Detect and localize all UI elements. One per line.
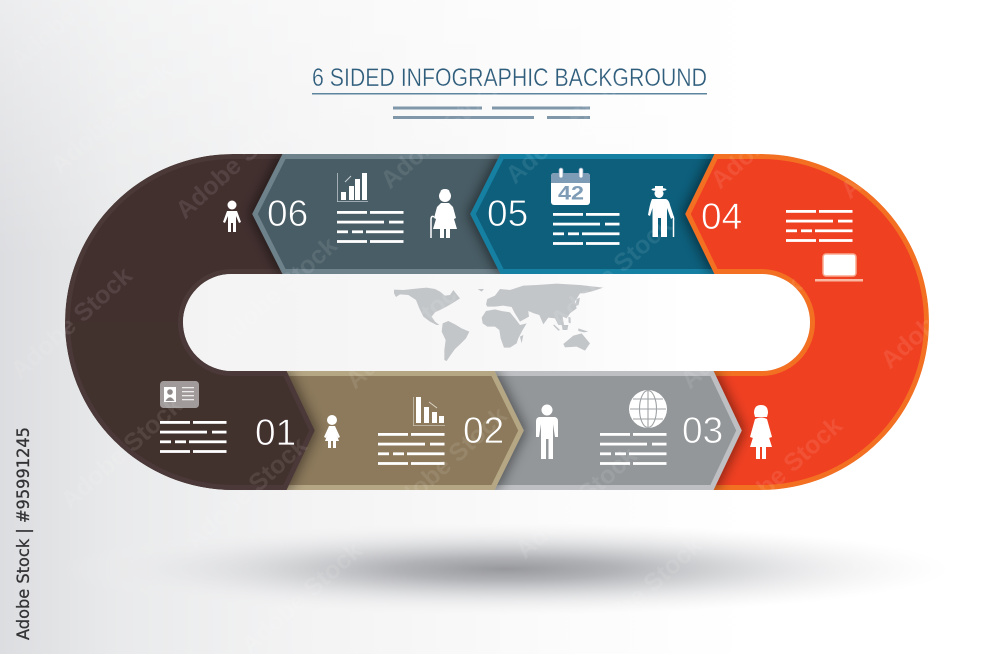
icon: calendar (551, 168, 590, 205)
icon: ID card (160, 381, 199, 408)
watermark: Adobe Stock (835, 81, 968, 204)
title underline and subtitle lines (312, 93, 707, 119)
icon: child (223, 200, 241, 232)
watermark: Adobe Stock (510, 441, 643, 564)
number 01: 01 (255, 412, 296, 453)
stock id label: Adobe Stock | #95991245 (14, 427, 34, 640)
text lines 01 (160, 421, 226, 453)
text lines 03 (600, 433, 666, 465)
watermark: Adobe Stock (500, 66, 633, 189)
number 03: 03 (682, 410, 723, 451)
icon: elderly woman (431, 189, 457, 238)
world map (394, 284, 603, 361)
floor shadow (60, 523, 950, 615)
icon: rising chart (337, 173, 368, 202)
icon: laptop (815, 254, 863, 282)
watermark: Adobe Stock (55, 391, 188, 514)
text lines 02 (378, 433, 444, 465)
watermark: Adobe Stock (705, 71, 838, 194)
text lines 04 (786, 210, 852, 242)
watermark: Adobe Stock (45, 56, 178, 179)
segment 02 tan (270, 374, 521, 488)
icon: falling chart (413, 397, 445, 426)
watermark: Adobe Stock (675, 271, 808, 394)
segment 05 teal (473, 156, 740, 272)
watermark: Adobe Stock (375, 71, 508, 194)
number 02: 02 (463, 410, 504, 451)
segment 03 gray (480, 374, 739, 488)
title: 6 SIDED INFOGRAPHIC BACKGROUND (312, 64, 707, 92)
segment: brown upper (68, 156, 312, 488)
centre opening (183, 274, 810, 371)
icon: girl (324, 415, 340, 448)
watermark: Adobe Stock (170, 101, 303, 224)
icon: elderly man (648, 186, 674, 237)
watermark: Adobe Stock (575, 531, 708, 654)
text lines 05 (553, 213, 620, 245)
watermark: Adobe Stock (545, 211, 678, 334)
segment 06 slate (255, 156, 530, 272)
background top highlight (0, 0, 1000, 260)
icon: globe (629, 390, 667, 428)
watermark: Adobe Stock (5, 261, 138, 384)
number 06: 06 (267, 193, 308, 234)
number 04: 04 (701, 196, 742, 237)
watermark: Adobe Stock (180, 431, 313, 554)
watermark: Adobe Stock (840, 451, 973, 574)
watermark: Adobe Stock (340, 271, 473, 394)
icon: man (536, 404, 558, 459)
watermark: Adobe Stock (380, 401, 513, 524)
watermark: Adobe (5, 2, 82, 74)
ring of six segments (68, 156, 927, 488)
icon: calendar: 42 (558, 184, 584, 204)
watermark: Adobe Stock (210, 231, 343, 354)
segment 04 red (688, 156, 926, 488)
text lines 06 (337, 211, 404, 243)
numbers (255, 193, 742, 453)
segment 01 brown lower (65, 322, 322, 490)
watermark: Adobe Stock (715, 411, 848, 534)
icon: woman (750, 405, 772, 459)
number 05: 05 (487, 193, 528, 234)
